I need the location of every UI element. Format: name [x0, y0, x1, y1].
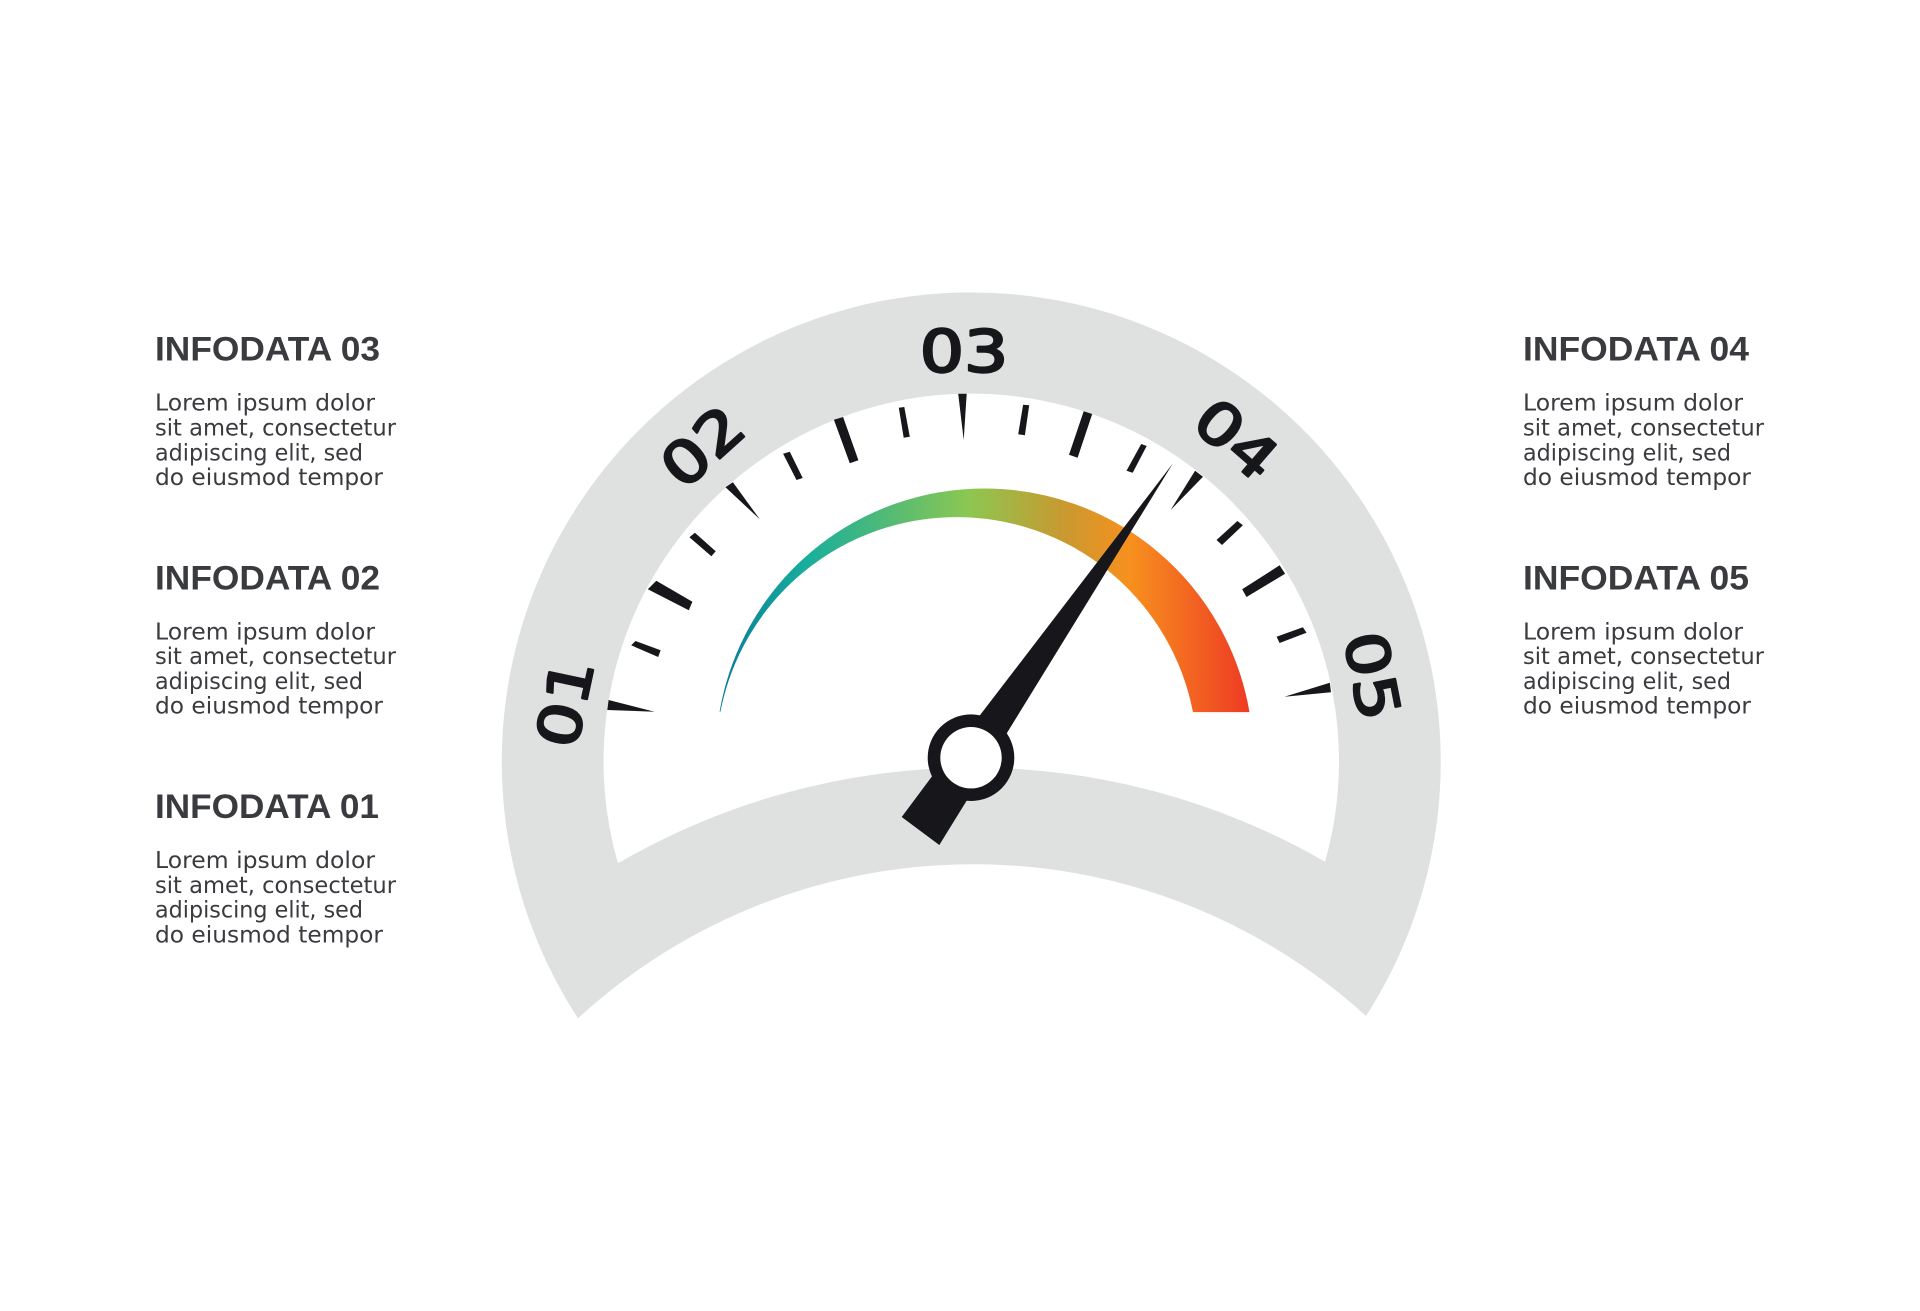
text block: infodata 05: adipiscing elit, sed: [1523, 669, 1731, 695]
text block: infodata 01: adipiscing elit, sed: [155, 898, 363, 924]
text block: infodata 01: [155, 788, 397, 948]
text block: infodata 04: sit amet, consectetur: [1523, 416, 1765, 442]
gauge dial ring: [502, 292, 1441, 1018]
text block: infodata 02: INFODATA 02: [155, 559, 380, 597]
scale number 03: 03: [920, 319, 1008, 386]
text block: infodata 04: INFODATA 04: [1523, 331, 1749, 369]
text block: infodata 02: sit amet, consectetur: [155, 644, 397, 670]
text block: infodata 05: do eiusmod tempor: [1523, 694, 1752, 720]
text block: infodata 02: do eiusmod tempor: [155, 694, 384, 720]
needle: [902, 463, 1173, 845]
scale number 05: 05: [1329, 626, 1412, 726]
gauge: [502, 292, 1441, 1018]
text block: infodata 03: adipiscing elit, sed: [155, 440, 363, 466]
text block: infodata 02: Lorem ipsum dolor: [155, 619, 376, 645]
text block: infodata 05: INFODATA 05: [1523, 559, 1749, 597]
text block: infodata 03: Lorem ipsum dolor: [155, 391, 376, 417]
text block: infodata 02: adipiscing elit, sed: [155, 669, 363, 695]
scale number 04: 04: [1180, 386, 1291, 495]
text block: infodata 01: INFODATA 01: [155, 788, 379, 826]
text block: infodata 03: do eiusmod tempor: [155, 465, 384, 491]
text block: infodata 04: [1523, 331, 1765, 491]
gradient arc: [720, 489, 1249, 712]
text block: infodata 03: INFODATA 03: [155, 331, 380, 369]
text block: infodata 04: adipiscing elit, sed: [1523, 440, 1731, 466]
text block: infodata 02: [155, 559, 397, 720]
scale number 01: 01: [525, 653, 609, 754]
text block: infodata 05: Lorem ipsum dolor: [1523, 619, 1744, 645]
text block: infodata 05: sit amet, consectetur: [1523, 644, 1765, 670]
text block: infodata 01: do eiusmod tempor: [155, 922, 384, 948]
text block: infodata 03: [155, 331, 397, 491]
text block: infodata 04: do eiusmod tempor: [1523, 465, 1752, 491]
text block: infodata 03: sit amet, consectetur: [155, 416, 397, 442]
text block: infodata 01: Lorem ipsum dolor: [155, 848, 376, 874]
scale ticks: [607, 394, 1331, 712]
text block: infodata 04: Lorem ipsum dolor: [1523, 391, 1744, 417]
text block: infodata 01: sit amet, consectetur: [155, 873, 397, 899]
scale number 02: 02: [648, 393, 759, 502]
text block: infodata 05: [1523, 559, 1765, 720]
